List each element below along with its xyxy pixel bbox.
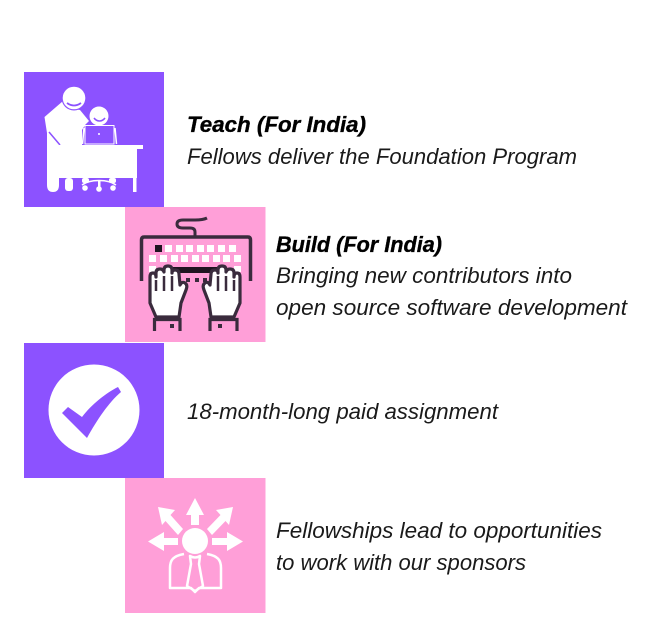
icon: check mark bbox=[48, 364, 140, 456]
panel: assignment icon tile bbox=[24, 343, 164, 478]
heading: build: Build (For India) bbox=[276, 232, 442, 257]
text: opportunities: Fellowships lead to opportunities bbox=[276, 518, 602, 543]
icon: person with outward arrows bbox=[148, 498, 243, 592]
text: opportunities: to work with our sponsors bbox=[276, 550, 526, 575]
heading: teach: Teach (For India) bbox=[187, 112, 366, 137]
text: build description: open source software development bbox=[276, 295, 628, 320]
icon: teacher and student at desk bbox=[44, 86, 143, 192]
panel: opportunities icon tile bbox=[125, 478, 266, 613]
text: opportunities bbox=[276, 518, 602, 575]
panel: teach icon tile bbox=[24, 72, 164, 207]
panel: build icon tile bbox=[125, 207, 266, 342]
text: build description bbox=[276, 263, 628, 320]
text: build description: Bringing new contributors into bbox=[276, 263, 572, 288]
icon: hands on keyboard bbox=[142, 218, 250, 331]
text: teach description: Fellows deliver the Foundation Program bbox=[187, 144, 577, 169]
text: assignment: 18-month-long paid assignment bbox=[187, 399, 499, 424]
